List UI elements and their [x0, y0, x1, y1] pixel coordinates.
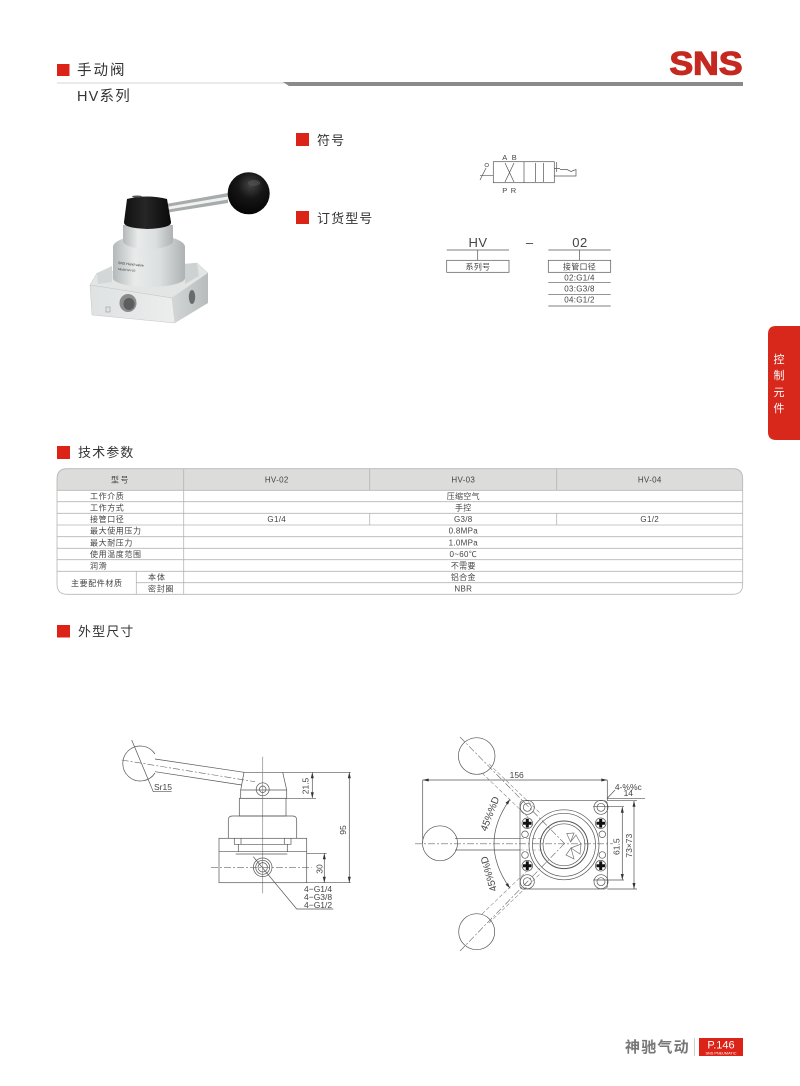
series subtitle: HV系列 — [77, 88, 131, 105]
technical parameters table: 手控 — [455, 502, 472, 512]
section heading: outline dimensions: 外型尺寸 — [78, 624, 134, 639]
top view dimension drawing: 4-%%c — [615, 782, 643, 792]
ordering code diagram: HV — [468, 235, 488, 250]
side view dimension drawing: 21.5 — [300, 777, 310, 794]
ordering code diagram: 04:G1/2 — [564, 296, 595, 304]
ordering code diagram: 03:G3/8 — [564, 284, 595, 294]
technical parameters table: 使用温度范围 — [90, 549, 142, 559]
footer divider — [694, 1038, 695, 1056]
product photo: HV hand valve — [90, 172, 270, 323]
technical parameters table: 1.0MPa — [449, 538, 478, 547]
technical parameters table: 接管口径 — [90, 514, 124, 524]
side tab: control components: 件 — [774, 402, 784, 415]
side tab: control components — [768, 326, 800, 440]
header rule — [57, 82, 743, 86]
technical parameters table: HV-04 — [638, 476, 662, 484]
technical parameters table: 型号 — [111, 476, 130, 484]
product photo: HV hand valve: SNS Hand valve — [118, 261, 144, 268]
ordering code diagram: 02:G1/4 — [564, 273, 595, 282]
top view dimension drawing — [415, 737, 645, 951]
side view dimension drawing: 4−G1/2 — [304, 900, 332, 910]
top view dimension drawing: 45%%D — [479, 795, 502, 833]
section heading: manual valve — [57, 62, 126, 79]
pneumatic valve symbol: B — [512, 153, 517, 162]
section heading: technical parameters: 技术参数 — [78, 445, 134, 460]
technical parameters table: 工作方式 — [90, 502, 124, 512]
technical parameters table: 0~60℃ — [450, 550, 477, 559]
top view dimension drawing: 61.5 — [612, 838, 622, 855]
technical parameters table: 主要配件材质 — [71, 578, 123, 588]
technical parameters table: 润滑 — [90, 560, 107, 570]
section heading: symbol: 符号 — [317, 133, 345, 148]
ordering code diagram: – — [526, 235, 534, 250]
technical parameters table: 不需要 — [451, 562, 476, 570]
black cross-head screws — [522, 818, 606, 871]
section heading: manual valve: 手动阀 — [77, 62, 126, 79]
technical parameters table — [57, 469, 743, 594]
technical parameters table: HV-03 — [451, 476, 475, 484]
logo: SNS: SNS — [670, 45, 742, 81]
technical parameters table: 工作介质 — [90, 491, 124, 501]
side view dimension drawing: 30 — [314, 864, 324, 874]
corner mounting holes — [520, 800, 608, 889]
pneumatic valve symbol — [480, 153, 576, 195]
side tab: control components: 元 — [774, 387, 784, 399]
side view dimension drawing: 95 — [338, 825, 348, 835]
pneumatic valve symbol: A — [502, 153, 507, 162]
top view dimension drawing: 14 — [624, 788, 633, 798]
technical parameters table: 铝合金 — [451, 572, 476, 582]
footer brand name: 神驰气动 — [625, 1038, 690, 1056]
side view dimension drawing: 4−G3/8 — [304, 892, 332, 902]
page number badge — [699, 1038, 743, 1056]
top view dimension drawing: 45%%D — [479, 855, 500, 893]
pneumatic valve symbol: P — [502, 186, 507, 195]
ordering code diagram: 02 — [572, 235, 588, 250]
side tab: control components: 控 — [774, 352, 784, 366]
technical parameters table: NBR — [454, 584, 472, 594]
side view dimension drawing — [122, 740, 351, 910]
side view dimension drawing: 4−G1/4 — [304, 884, 332, 894]
ordering code diagram — [447, 235, 611, 306]
top view dimension drawing: 156 — [510, 770, 524, 780]
side tab: control components: 制 — [774, 369, 784, 382]
technical parameters table: G1/2 — [640, 515, 659, 524]
technical parameters table: 0.8MPa — [449, 527, 478, 536]
product photo: HV hand valve: Model:HV-02 — [118, 267, 136, 273]
technical parameters table: G1/4 — [267, 515, 286, 524]
page number badge: SNS PNEUMATIC — [706, 1052, 737, 1056]
pneumatic valve symbol: R — [511, 186, 517, 195]
section heading: symbol — [296, 133, 345, 148]
technical parameters table: 最大耐压力 — [90, 537, 133, 547]
ordering code diagram: 接管口径 — [563, 261, 596, 271]
ordering code diagram: 系列号 — [466, 261, 490, 271]
technical parameters table: 压缩空气 — [447, 491, 480, 501]
technical parameters table: 密封圈 — [148, 584, 174, 594]
page number badge: P.146 — [707, 1040, 735, 1052]
section heading: ordering code: 订货型号 — [317, 211, 373, 226]
side view dimension drawing: Sr15 — [154, 782, 172, 792]
technical parameters table: HV-02 — [265, 476, 289, 484]
top view dimension drawing: 73×73 — [624, 833, 634, 858]
technical parameters table: 最大使用压力 — [90, 526, 142, 536]
technical parameters table: 本体 — [148, 572, 166, 582]
technical parameters table: G3/8 — [454, 515, 473, 524]
